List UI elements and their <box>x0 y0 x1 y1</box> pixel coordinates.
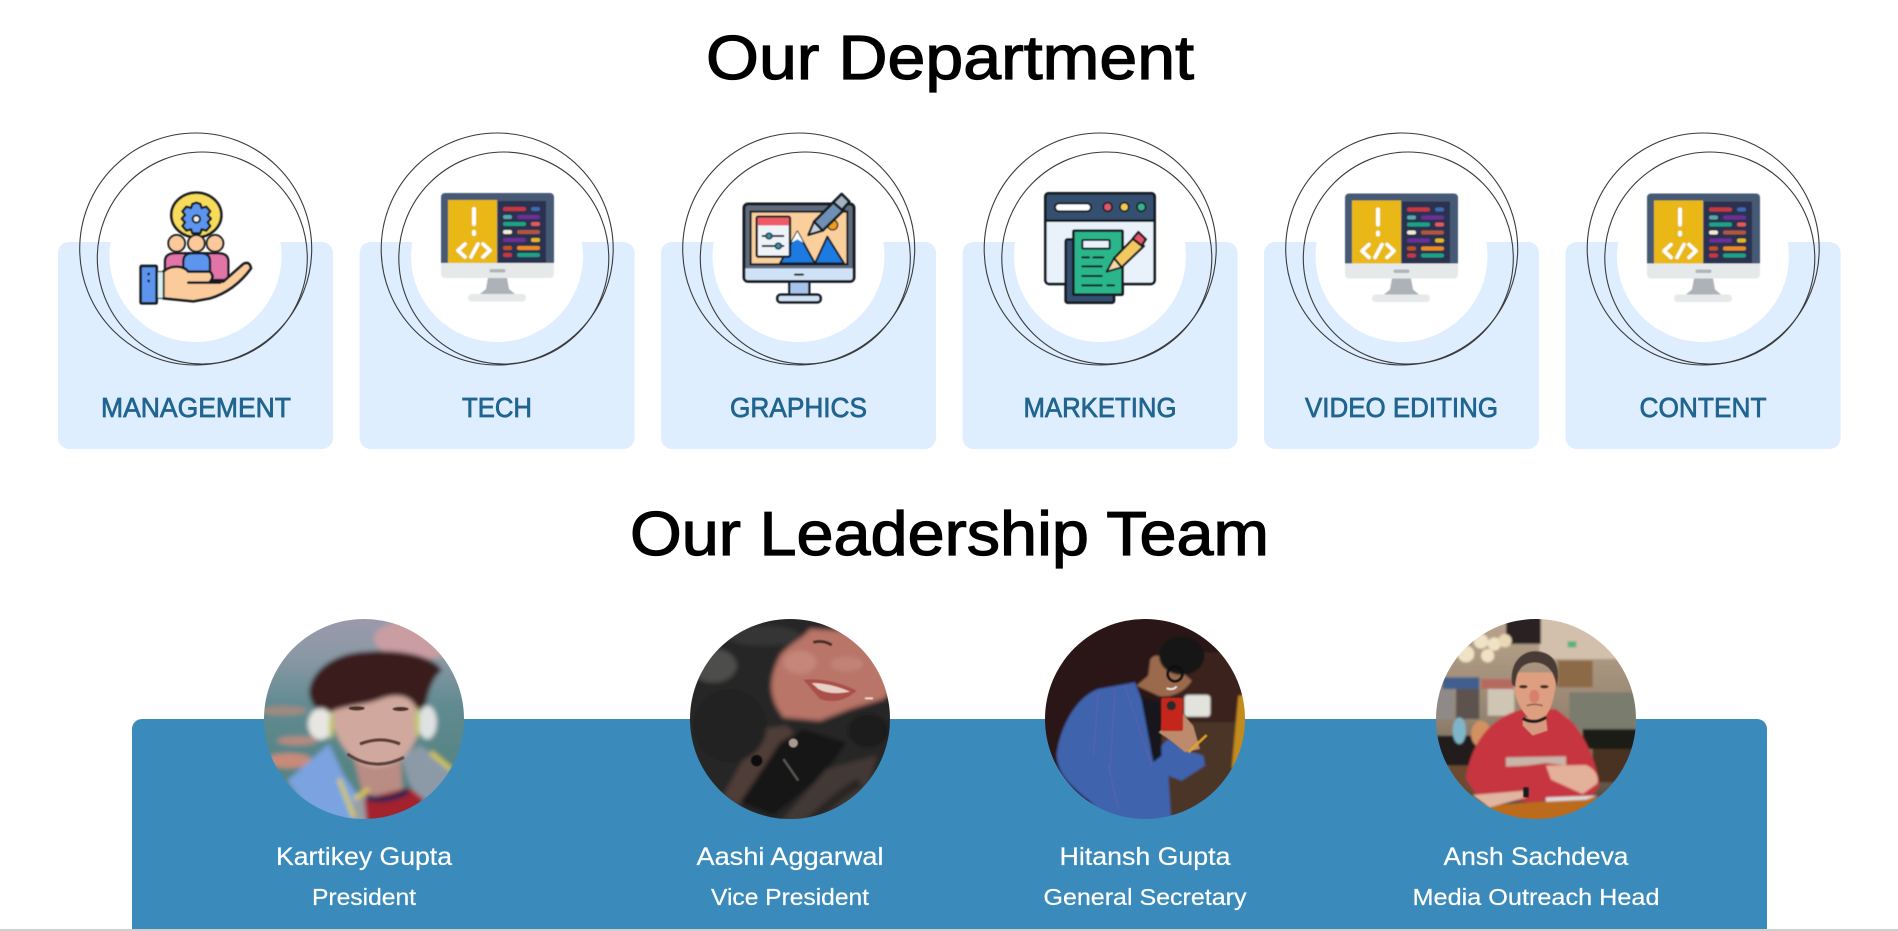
card: tech <box>360 133 635 449</box>
member: Ansh Sachdeva <box>1412 596 1660 910</box>
label: GRAPHICS <box>730 392 867 423</box>
role: President <box>312 884 417 910</box>
card: management <box>58 133 333 449</box>
card: graphics <box>661 133 936 449</box>
icon: code monitor <box>1345 194 1458 302</box>
label: VIDEO EDITING <box>1305 392 1498 423</box>
title: Our Leadership Team: Our Leadership Team <box>630 500 1269 569</box>
name: Ansh Sachdeva <box>1444 843 1629 871</box>
photo: Hitansh Gupta <box>1045 619 1245 819</box>
icon: document in browser window with pencil <box>1045 193 1155 303</box>
member: Hitansh Gupta <box>1044 619 1247 910</box>
icon: design monitor with pen <box>744 194 854 302</box>
name: Kartikey Gupta <box>276 843 452 871</box>
icon: code monitor <box>1647 194 1760 302</box>
role: General Secretary <box>1044 884 1247 910</box>
name: Hitansh Gupta <box>1060 843 1231 871</box>
icon: team in hand with gear <box>141 193 251 303</box>
member: Kartikey Gupta <box>264 619 464 906</box>
role: Media Outreach Head <box>1412 884 1660 910</box>
panel: departments <box>58 133 1841 449</box>
photo: Aashi Aggarwal <box>690 619 890 819</box>
label: MARKETING <box>1024 392 1176 423</box>
photo: Kartikey Gupta <box>264 619 464 819</box>
label: MANAGEMENT <box>101 392 291 423</box>
role: Vice President <box>711 884 870 910</box>
photo: Ansh Sachdeva <box>1436 619 1636 819</box>
panel: leadership background <box>132 719 1767 931</box>
card: content <box>1566 133 1841 449</box>
title: Our Department: Our Department <box>706 24 1194 93</box>
card: marketing <box>963 133 1238 449</box>
label: CONTENT <box>1640 392 1766 423</box>
member: Aashi Aggarwal <box>690 619 890 906</box>
label: TECH <box>462 392 532 423</box>
icon: code monitor <box>441 193 554 302</box>
name: Aashi Aggarwal <box>696 843 884 871</box>
card: video editing <box>1264 133 1539 449</box>
